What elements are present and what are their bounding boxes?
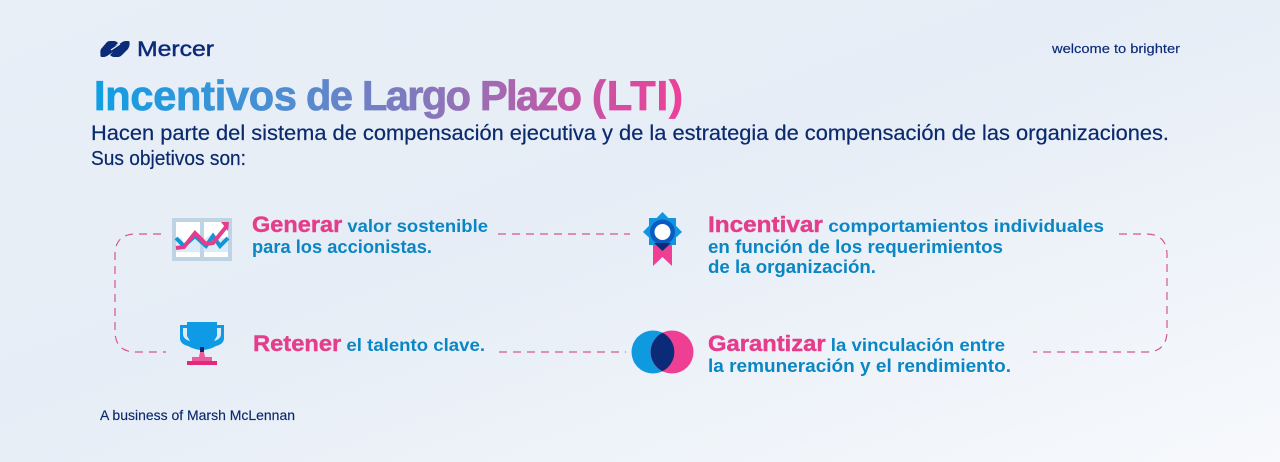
text: Generar: Generar valor sostenible — [252, 212, 488, 237]
intro text: Hacen parte del sistema de compensación ejecutiva y de la estrategia de compensación de las organizaciones. — [91, 122, 1169, 145]
footer: A business of Marsh McLennan — [100, 407, 295, 423]
icon: overlapping circles — [632, 330, 694, 374]
connector: right bracket — [1033, 234, 1167, 352]
icon: line chart — [172, 218, 232, 261]
connector: left bracket — [115, 234, 166, 352]
title: de — [306, 72, 353, 119]
title: Largo — [362, 72, 471, 119]
title — [94, 72, 683, 119]
text: Incentivar: en función de los requerimientos — [708, 237, 1003, 257]
title: Plazo — [480, 72, 582, 119]
icon: ribbon medal — [643, 212, 682, 266]
text: Retener: Retener el talento clave. — [253, 331, 485, 356]
logo wordmark: Mercer — [137, 38, 214, 61]
text: Garantizar: la remuneración y el rendimiento. — [708, 356, 1011, 376]
text: Garantizar: Garantizar la vinculación entre — [708, 331, 1005, 356]
title: Incentivos — [94, 72, 297, 119]
text: Incentivar — [708, 212, 1104, 277]
icon: trophy — [180, 322, 224, 365]
connector: bottom middle — [499, 351, 626, 353]
text: Generar: para los accionistas. — [252, 237, 432, 257]
title: (LTI) — [592, 72, 683, 119]
icon: Mercer logo — [100, 41, 130, 57]
text: Generar — [252, 212, 488, 257]
text: Garantizar — [708, 331, 1011, 376]
tagline: welcome to brighter — [1051, 41, 1181, 56]
text: Incentivar: de la organización. — [708, 257, 876, 277]
intro text: Sus objetivos son: — [91, 148, 246, 170]
intro text — [91, 122, 1169, 170]
text: Incentivar: Incentivar comportamientos individuales — [708, 212, 1104, 237]
connector: top middle — [498, 233, 630, 235]
